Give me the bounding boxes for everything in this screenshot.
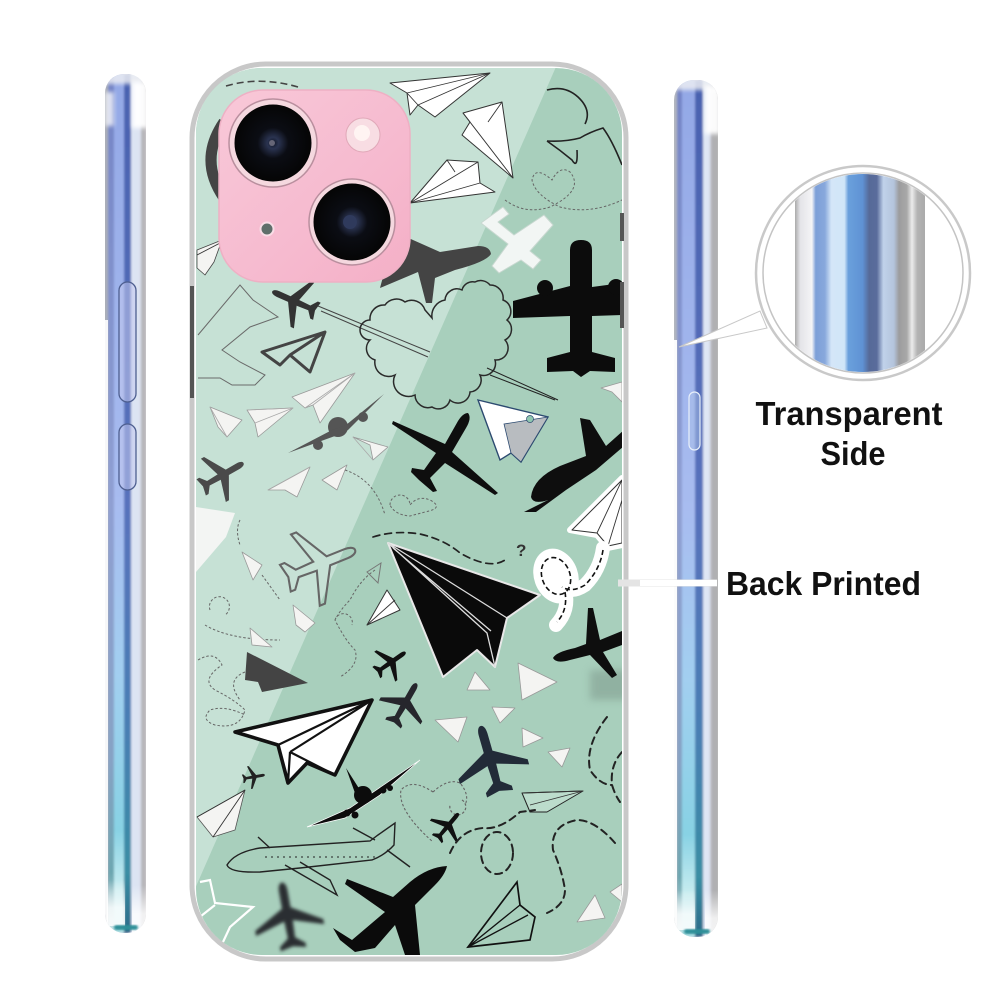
outlined paper plane right xyxy=(522,791,583,812)
paper plane top 2 xyxy=(462,102,513,178)
big white paper plane xyxy=(235,700,372,783)
small black plane 2 xyxy=(372,671,437,736)
white paper plane lower left xyxy=(197,790,245,837)
black dashed trails xyxy=(450,717,622,913)
leader line xyxy=(618,580,717,586)
dark half paper plane xyxy=(245,652,308,692)
dashed trail to big plane xyxy=(373,533,505,564)
small paper plane 1 xyxy=(242,552,262,580)
label: transparent side: Side xyxy=(820,435,886,472)
camera module xyxy=(219,90,410,282)
side buttons on frame xyxy=(190,213,624,398)
paper plane row 1 xyxy=(292,373,355,423)
dotted heart spiral xyxy=(450,800,466,815)
cloud trail right xyxy=(487,368,558,400)
small right paper plane xyxy=(601,382,622,402)
front view black plane xyxy=(307,760,420,827)
black squiggle xyxy=(547,89,622,165)
grey outline jet xyxy=(198,285,278,385)
microphone xyxy=(260,222,274,236)
paper plane top 1 xyxy=(390,73,490,117)
black plane centre xyxy=(392,413,498,495)
label: transparent side: Transparent xyxy=(756,395,943,432)
grey plane left xyxy=(196,457,244,502)
white paper plane mid xyxy=(367,590,400,625)
outline airliner xyxy=(227,823,410,895)
flash xyxy=(346,118,380,152)
outline paper plane bottom xyxy=(468,882,535,947)
front view grey plane xyxy=(288,394,384,453)
small paper plane 2 xyxy=(293,605,315,632)
right side view of phone xyxy=(670,76,722,942)
dark plane right xyxy=(524,418,624,512)
paper plane row 3 xyxy=(247,408,293,437)
white dashed sticker loop xyxy=(526,542,603,625)
icon: volume button up xyxy=(119,282,136,402)
paper plane row 2 xyxy=(210,407,242,437)
magnifier circle xyxy=(756,166,970,380)
big black plane xyxy=(513,240,624,377)
magnifier inner ring xyxy=(763,173,963,373)
small black plane 3 xyxy=(424,802,472,850)
dark outline paper plane xyxy=(262,332,325,372)
icon: volume button down xyxy=(119,424,136,490)
main lens xyxy=(229,99,317,187)
top centre grey loops xyxy=(345,470,436,516)
corner paper plane xyxy=(610,884,622,902)
camera plate xyxy=(219,90,410,282)
dotted heart outline xyxy=(401,782,467,842)
small left plane xyxy=(197,240,222,275)
magnified side stripes xyxy=(795,170,925,380)
paper plane row 5 xyxy=(268,467,310,497)
grey dashed trails left xyxy=(198,520,280,726)
left side view of phone xyxy=(105,74,146,933)
white paper plane at sticker xyxy=(570,478,622,548)
icon: power button xyxy=(689,392,700,450)
callout: transparent side xyxy=(679,166,970,472)
leader line white core xyxy=(640,580,717,586)
question mark: ? xyxy=(516,541,526,560)
white outline plane bottom left xyxy=(196,880,253,942)
dashed heart trail xyxy=(505,170,622,210)
paper plane top 3 xyxy=(410,160,495,203)
small plane near white plane xyxy=(241,764,267,790)
small grey paper plane bottom xyxy=(577,895,605,922)
white propeller plane xyxy=(481,207,553,273)
dark plane with trail xyxy=(272,282,430,358)
paper plane row 4 xyxy=(353,437,388,460)
outline plane xyxy=(278,531,356,608)
doodle: white patch xyxy=(196,507,235,572)
dark plane behind camera xyxy=(380,232,491,303)
small black plane 1 xyxy=(366,637,416,688)
small paper plane group xyxy=(435,663,570,767)
big black paper plane xyxy=(388,543,540,677)
label: back printed: Back Printed xyxy=(726,565,921,602)
phone back case xyxy=(189,60,630,960)
small paper plane 3 xyxy=(250,628,272,647)
navy plane xyxy=(446,716,535,804)
second lens xyxy=(309,179,395,265)
magnifier pointer xyxy=(679,311,767,347)
paper plane row 6 xyxy=(322,465,347,490)
big black plane bottom xyxy=(333,866,447,955)
heart shaped cloud xyxy=(360,281,511,409)
doodle: grey ring behind camera xyxy=(211,122,224,198)
case frame xyxy=(192,64,626,959)
blue outlined paper plane xyxy=(478,400,548,462)
doodle: top dashed trail xyxy=(226,81,298,87)
blurred plane xyxy=(248,877,328,955)
small outlined plane xyxy=(367,563,381,583)
grey loop trail xyxy=(335,570,375,677)
printed back panel xyxy=(189,60,630,960)
right black plane xyxy=(553,608,622,678)
dashed egg loop xyxy=(481,832,513,874)
